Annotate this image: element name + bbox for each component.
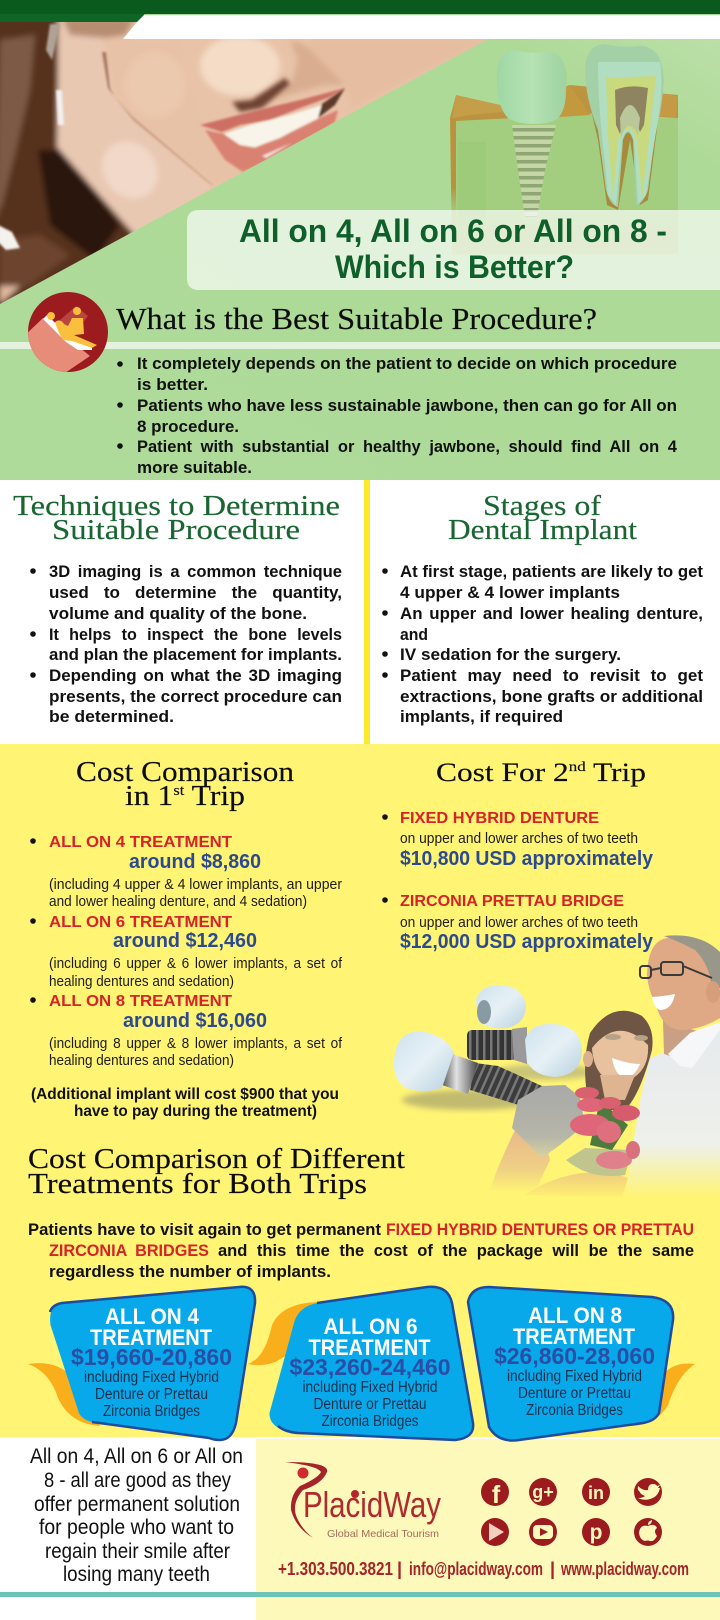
list: techniques: be determined.	[49, 708, 174, 726]
list: techniques	[30, 563, 342, 726]
list: first trip costs: healing dentures and sedation)	[49, 974, 234, 990]
flowers	[566, 1087, 640, 1176]
text block: second visit note: Patients have to visit again to get permanent	[28, 1221, 382, 1239]
heading: what is the best suitable procedure: What is the Best Suitable Procedure?	[116, 301, 597, 336]
card: all on 6 treatment: TREATMENT	[308, 1335, 431, 1360]
heading: cost for 2nd trip: Cost For 2	[436, 758, 546, 787]
list: stages: An upper and lower healing denture,	[400, 605, 703, 623]
list: procedure points: is better.	[137, 376, 208, 394]
list: stages: 4 upper & 4 lower implants	[400, 584, 620, 602]
logo: PlacidWay	[285, 1462, 441, 1540]
card: all on 6 treatment: ALL ON 6	[324, 1314, 418, 1339]
text block: conclusion	[30, 1445, 243, 1586]
list: first trip costs: around $12,460	[113, 930, 257, 952]
icon: youtube	[529, 1518, 557, 1546]
list: second trip costs: on upper and lower arches of two teeth	[400, 915, 638, 931]
list: techniques: volume and quality of the bone.	[49, 605, 307, 623]
list: procedure points: more suitable.	[137, 459, 252, 477]
list: stages: Patient may need to revisit to get	[400, 667, 704, 685]
icon: apple	[634, 1518, 662, 1546]
heading: techniques	[13, 490, 340, 546]
text block: second visit note: regardless the number of implants.	[49, 1263, 331, 1281]
list: techniques: It helps to inspect the bone levels	[49, 626, 342, 644]
list: procedure points: Patient with substantial or healthy jawbone, should find All on 4	[137, 438, 678, 456]
card: all on 6 treatment: Denture or Prettau	[314, 1396, 426, 1413]
note: additional implant cost	[31, 1086, 339, 1120]
list: techniques: used to determine the quantity,	[49, 584, 342, 602]
title banner: All on 4, All on 6 or All on 8 -	[239, 213, 667, 249]
list: first trip costs: and lower healing denture, and 4 sedation)	[49, 894, 307, 910]
contact line	[278, 1559, 689, 1579]
heading: stages: Stages of	[483, 490, 601, 522]
heading: techniques: Techniques to Determine	[13, 490, 340, 522]
card: all on 4 treatment: TREATMENT	[90, 1325, 213, 1350]
list: second trip costs: $10,800 USD approximately	[400, 848, 654, 870]
list: first trip costs: healing dentures and sedation)	[49, 1053, 234, 1069]
heading: cost comparison in 1st trip: st	[173, 783, 185, 799]
card: all on 4 treatment: Denture or Prettau	[95, 1386, 208, 1403]
heading: cost comparison in 1st trip: in 1	[125, 780, 169, 812]
note: additional implant cost: (Additional implant will cost $900 that you	[31, 1086, 339, 1103]
card: all on 8 treatment: Denture or Prettau	[518, 1385, 631, 1402]
heading: stages	[448, 490, 637, 546]
bone block	[450, 85, 678, 255]
list: procedure points: It completely depends on the patient to decide on which procedure	[137, 355, 677, 373]
list: stages: IV sedation for the surgery.	[400, 646, 621, 664]
card: all on 8 treatment: TREATMENT	[513, 1324, 636, 1349]
contact line: info@placidway.com	[409, 1559, 543, 1579]
text block: conclusion: 8 - all are good as they	[44, 1469, 231, 1492]
illustration: dental implant and tooth in bone	[450, 44, 678, 255]
list: first trip costs	[30, 834, 343, 1069]
logo: PlacidWay: Global Medical Tourism	[327, 1528, 439, 1540]
icon: linkedin: in	[588, 1483, 604, 1503]
icon: facebook	[481, 1478, 509, 1509]
contact line: +1.303.500.3821	[278, 1559, 393, 1579]
heading: cost for 2nd trip: Trip	[586, 758, 646, 787]
card: all on 6 treatment: including Fixed Hybrid	[302, 1379, 438, 1396]
list: stages: implants, if required	[400, 708, 563, 726]
list: second trip costs: FIXED HYBRID DENTURE	[400, 810, 599, 827]
decorative orange leaves	[28, 1302, 695, 1426]
card: all on 8 treatment: $26,860-28,060	[494, 1343, 655, 1369]
text block: second visit note: FIXED HYBRID DENTURES OR PRETTAU	[386, 1221, 694, 1239]
card: all on 4 treatment: ALL ON 4	[105, 1304, 200, 1329]
list: second trip costs: $12,000 USD approximately	[400, 931, 654, 953]
list: first trip costs: around $16,060	[123, 1010, 267, 1032]
card: all on 8 treatment: Zirconia Bridges	[526, 1402, 623, 1419]
heading: cost comparison of different treatments	[28, 1143, 405, 1200]
heading: cost comparison in 1st trip: Trip	[184, 780, 245, 812]
icon: dental chair	[28, 292, 108, 372]
list: procedure points	[117, 355, 678, 477]
heading: cost comparison of different treatments: Treatments for Both Trips	[28, 1168, 367, 1200]
list: second trip costs: on upper and lower arches of two teeth	[400, 831, 638, 847]
card: all on 4 treatment: including Fixed Hybrid	[84, 1369, 219, 1386]
card: all on 8 treatment: ALL ON 8	[528, 1303, 622, 1328]
icon: facebook: f	[492, 1481, 501, 1509]
list: stages: At first stage, patients are likely to get	[400, 563, 704, 581]
list: first trip costs: ALL ON 8 TREATMENT	[49, 993, 232, 1010]
text block: conclusion: losing many teeth	[63, 1563, 210, 1586]
card: all on 6 treatment: $23,260-24,460	[290, 1354, 450, 1380]
title banner: Which is Better?	[335, 249, 574, 285]
heading: techniques: Suitable Procedure	[52, 514, 300, 546]
text block: second visit note: and this time the cost of the package will be the same	[218, 1242, 694, 1260]
list: procedure points: Patients who have less sustainable jawbone, then can go for All on	[137, 397, 677, 415]
text block: second visit note: ZIRCONIA BRIDGES	[49, 1242, 209, 1260]
icon: google plus: g+	[532, 1482, 554, 1502]
card: all on 8 treatment: including Fixed Hybrid	[507, 1368, 642, 1385]
list: techniques: 3D imaging is a common technique	[49, 563, 342, 581]
heading: cost for 2nd trip: nd	[569, 760, 586, 775]
text block: conclusion: offer permanent solution	[34, 1493, 240, 1516]
card: all on 4 treatment: $19,660-20,860	[71, 1344, 232, 1370]
implant crown	[497, 50, 567, 124]
woman	[490, 1011, 653, 1197]
text block: conclusion: for people who want to	[39, 1516, 234, 1539]
heading: cost comparison in 1st trip: Cost Comparison	[76, 756, 295, 788]
text block: conclusion: regain their smile after	[45, 1540, 230, 1563]
list: stages: extractions, bone grafts or additional	[400, 688, 703, 706]
text block: second visit note	[28, 1221, 694, 1281]
list: stages	[382, 563, 704, 726]
list: second trip costs: ZIRCONIA PRETTAU BRIDGE	[400, 893, 624, 910]
card: all on 6 treatment	[269, 1287, 473, 1440]
list: techniques: Depending on what the 3D imaging	[49, 667, 342, 685]
illustration: three dental implants	[394, 985, 595, 1110]
top bar	[0, 0, 720, 39]
implant screw	[512, 125, 556, 217]
list: first trip costs: ALL ON 6 TREATMENT	[49, 914, 232, 931]
logo: PlacidWay: PlacidWay	[303, 1484, 441, 1525]
note: additional implant cost: have to pay during the treatment)	[74, 1103, 317, 1120]
list: first trip costs: (including 8 upper & 8 lower implants, a set of	[49, 1036, 343, 1052]
icon: google plus	[529, 1478, 557, 1506]
list: techniques: presents, the correct procedure can	[49, 688, 342, 706]
natural tooth	[585, 44, 664, 210]
list: first trip costs: around $8,860	[129, 851, 261, 873]
heading: cost comparison of different treatments: Cost Comparison of Different	[28, 1143, 405, 1175]
card: all on 6 treatment: Zirconia Bridges	[322, 1413, 419, 1430]
icons: social media	[481, 1478, 662, 1546]
list: second trip costs	[382, 810, 654, 953]
title banner	[187, 210, 720, 290]
text block: conclusion: All on 4, All on 6 or All on	[30, 1445, 243, 1468]
contact line: |	[550, 1559, 555, 1579]
icon: pinterest	[582, 1518, 610, 1546]
icon: twitter	[634, 1478, 662, 1506]
icon: linkedin	[582, 1478, 610, 1506]
list: first trip costs: (including 4 upper & 4 lower implants, an upper	[49, 877, 342, 893]
panel: techniques and stages	[0, 480, 720, 744]
card: all on 8 treatment	[468, 1287, 673, 1440]
list: techniques: and plan the placement for implants.	[49, 646, 342, 664]
panel: yellow cost section	[0, 744, 720, 1437]
background: green hero panel	[0, 39, 720, 480]
heading: cost comparison in 1st trip	[76, 756, 295, 812]
list: procedure points: 8 procedure.	[137, 418, 239, 436]
man	[625, 935, 720, 1197]
card: all on 4 treatment: Zirconia Bridges	[103, 1403, 200, 1420]
card: all on 4 treatment	[50, 1287, 255, 1440]
icon: google play	[481, 1518, 509, 1546]
list: first trip costs: ALL ON 4 TREATMENT	[49, 834, 232, 851]
list: first trip costs: (including 6 upper & 6 lower implants, a set of	[49, 956, 343, 972]
photo: smiling woman	[0, 15, 490, 315]
panel: best suitable procedure	[0, 292, 720, 477]
list: stages: and	[400, 626, 428, 644]
contact line: |	[397, 1559, 402, 1579]
icon: pinterest: p	[590, 1521, 602, 1544]
heading: stages: Dental Implant	[448, 514, 637, 546]
photo: happy couple with flowers	[490, 935, 720, 1197]
panel: closing text and footer	[0, 1437, 720, 1620]
